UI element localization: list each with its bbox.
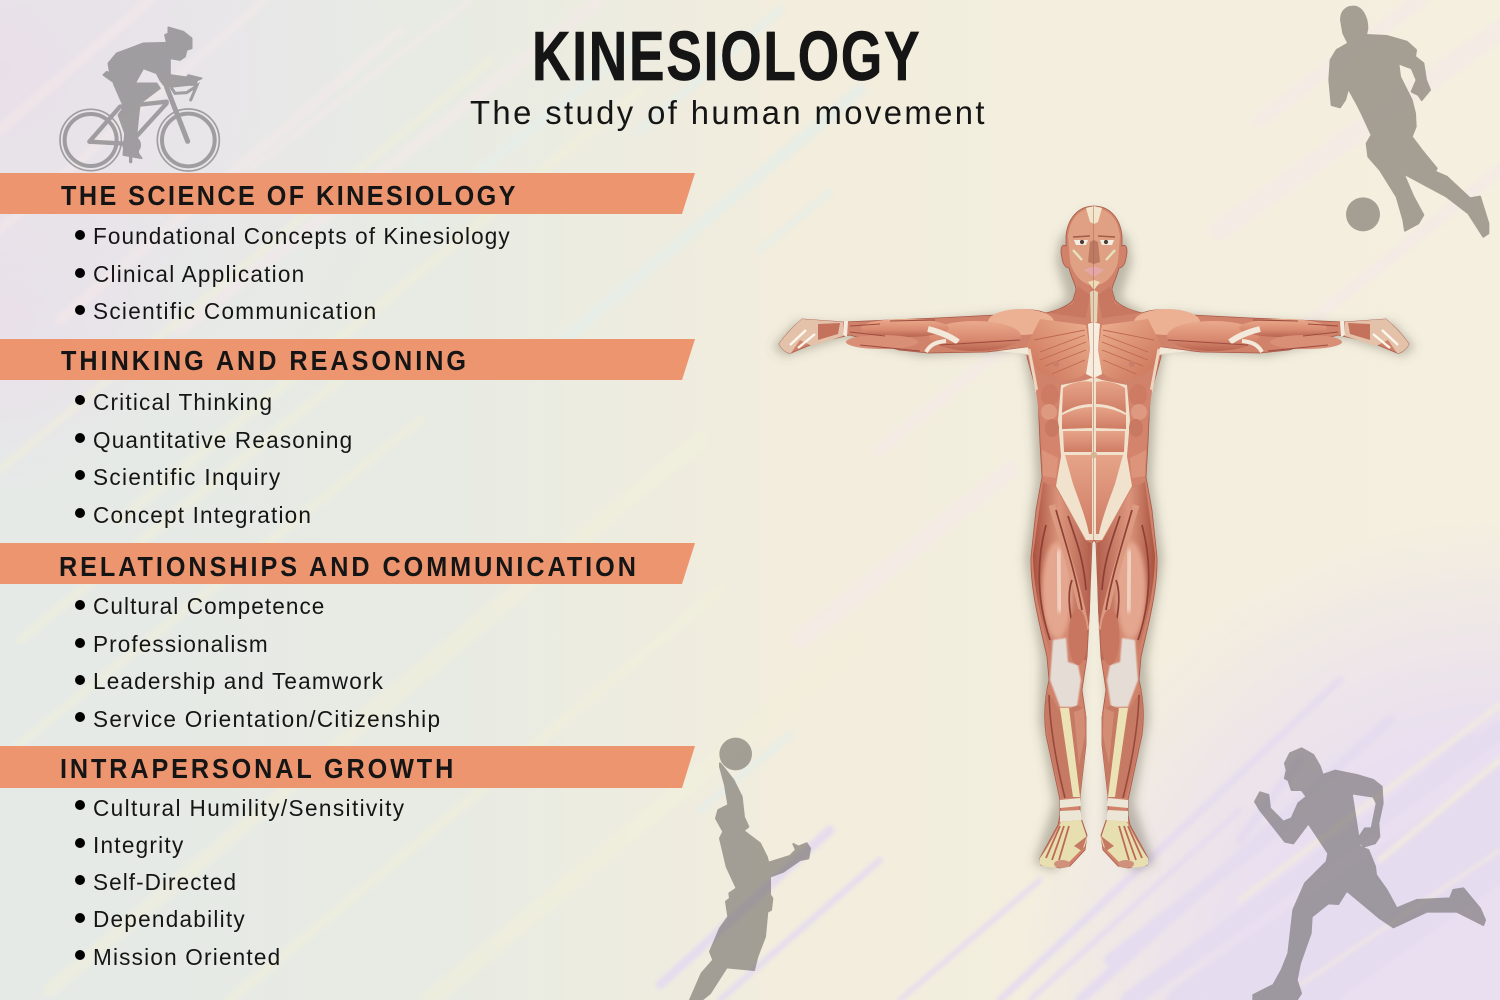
list item: Mission Oriented (93, 944, 280, 970)
heading band (0, 746, 695, 788)
list item: Dependability (93, 906, 245, 932)
panel: thinking and reasoning (0, 339, 695, 528)
list item: Service Orientation/Citizenship (93, 706, 440, 732)
mirrored right half of figure (1091, 206, 1415, 871)
list item: Concept Integration (93, 502, 311, 528)
icon: basketball player silhouette (690, 738, 810, 1000)
list item: Cultural Competence (93, 593, 324, 619)
ankle and foot (1040, 798, 1087, 868)
heading band: THINKING AND REASONING (61, 345, 466, 376)
panel: relationships and communication (0, 543, 695, 732)
icon: soccer player silhouette (1329, 7, 1488, 237)
list item: Scientific Communication (93, 298, 376, 324)
panel: intrapersonal growth (0, 746, 695, 970)
abdominal muscles (1036, 377, 1097, 540)
heading band (0, 173, 695, 214)
list item: Professionalism (93, 631, 268, 657)
body base (779, 206, 1094, 868)
list item: Self-Directed (93, 869, 236, 895)
list item: Scientific Inquiry (93, 464, 281, 490)
sternum tendon (1086, 322, 1094, 378)
heading band: THE SCIENCE OF KINESIOLOGY (61, 180, 516, 211)
list item: Foundational Concepts of Kinesiology (93, 223, 510, 249)
vastus medialis muscle (1068, 609, 1088, 665)
list item: Clinical Application (93, 261, 304, 287)
list item: Quantitative Reasoning (93, 427, 352, 453)
list item: Leadership and Teamwork (93, 668, 383, 694)
drop shadow (773, 209, 1088, 871)
heading band (0, 339, 695, 380)
latissimus band (1029, 349, 1037, 392)
heading band: INTRAPERSONAL GROWTH (60, 753, 453, 784)
knee (1050, 638, 1081, 707)
heading band: RELATIONSHIPS AND COMMUNICATION (59, 551, 636, 582)
arm muscles (779, 309, 1054, 358)
list item: Critical Thinking (93, 389, 272, 415)
heading band (0, 543, 695, 584)
head and face (1068, 206, 1094, 290)
neck (1048, 286, 1090, 318)
anatomy figure: human muscular system (773, 206, 1415, 871)
list item: Cultural Humility/Sensitivity (93, 795, 405, 821)
chest muscle (1027, 319, 1090, 380)
icon: cyclist silhouette (60, 27, 219, 171)
subtitle: The study of human movement (470, 95, 985, 132)
title: KINESIOLOGY (532, 18, 920, 96)
list item: Integrity (93, 832, 184, 858)
icon: runner silhouette (1253, 748, 1485, 1000)
hand (779, 319, 843, 353)
panel: the science of kinesiology (0, 173, 695, 324)
thigh muscles (1033, 482, 1091, 660)
shin and calf (1045, 690, 1086, 798)
